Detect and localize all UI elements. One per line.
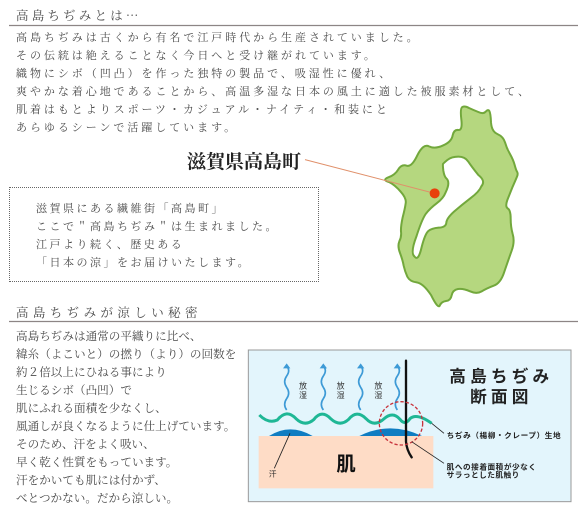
fabric wave xyxy=(259,414,432,423)
explanation text block: 風通しが良くなるように仕上げています。 xyxy=(16,418,235,434)
intro text block: 織物にシボ（凹凸）を作った独特の製品で、吸湿性に優れ、 xyxy=(16,65,393,81)
leader lines xyxy=(274,423,444,468)
explanation text block: 早く乾く性質をもっています。 xyxy=(16,454,177,470)
dashed highlight circle xyxy=(379,402,423,445)
intro text block: 爽やかな着心地であることから、高温多湿な日本の風土に適した被服素材として、 xyxy=(16,83,532,99)
explanation text block: 汗をかいても肌には付かず、 xyxy=(16,472,166,488)
sweat label: 汗 xyxy=(269,469,277,480)
skin label: 肌 xyxy=(336,448,356,476)
moisture labels xyxy=(299,381,382,401)
intro text block: その伝統は絶えることなく今日へと受け継がれています。 xyxy=(16,47,378,63)
callout text: 滋賀県にある繊維街「高島町」 xyxy=(36,200,225,216)
explanation text block: 肌にふれる面積を少なくし、 xyxy=(16,400,167,416)
fabric label: ちぢみ（楊柳・クレープ）生地 xyxy=(447,430,561,441)
moisture labels: 湿 xyxy=(337,390,345,401)
intro text block: あらゆるシーンで活躍しています。 xyxy=(16,119,238,135)
intro text block: 高島ちぢみは古くから有名で江戸時代から生産されていました。 xyxy=(16,29,421,45)
diagram title: 高島ちぢみ xyxy=(449,363,553,387)
moisture labels: 放 xyxy=(374,381,382,392)
moisture labels: 放 xyxy=(299,381,307,392)
contact label: サラっとした肌触り xyxy=(447,469,519,480)
callout text xyxy=(36,200,279,270)
diagram title xyxy=(449,363,553,407)
explanation text block: 緯糸（よこいと）の撚り（より）の回数を xyxy=(16,346,236,362)
moisture labels: 湿 xyxy=(299,390,307,401)
diagram title: 断面図 xyxy=(470,383,533,407)
intro text block: 肌着はもとよりスポーツ・カジュアル・ナイティ・和装にと xyxy=(16,101,390,117)
explanation text block: そのため、汗をよく吸い、 xyxy=(16,436,155,452)
callout text: ここで＂高島ちぢみ＂は生まれました。 xyxy=(36,218,279,234)
sweat drops xyxy=(269,428,422,436)
explanation text block: べとつかない。だから涼しい。 xyxy=(16,490,178,506)
moisture labels: 放 xyxy=(337,381,345,392)
moisture labels: 湿 xyxy=(374,390,382,401)
explanation text block xyxy=(16,328,236,506)
contact label: 肌への接着面積が少なく xyxy=(447,461,536,472)
fabric section line xyxy=(406,361,412,457)
explanation text block: 約２倍以上にひねる事により xyxy=(16,364,167,380)
callout text: 「日本の涼」をお届けいたします。 xyxy=(36,254,251,270)
skin xyxy=(259,436,433,488)
explanation text block: 生じるシボ（凸凹）で xyxy=(16,382,132,398)
moisture arrows xyxy=(285,366,399,410)
callout text: 江戸より続く、歴史ある xyxy=(36,236,184,252)
heading: why Chijimi is cool: 高島ちぢみが涼しい秘密 xyxy=(16,303,202,321)
cross-section diagram xyxy=(248,350,572,502)
intro text block xyxy=(16,29,532,135)
contact label xyxy=(447,461,536,480)
dotted callout box xyxy=(9,187,319,282)
map label: Takashima town, Shiga: 滋賀県高島町 xyxy=(187,147,301,174)
heading: what is Takashima Chijimi: 高島ちぢみとは… xyxy=(16,6,142,24)
explanation text block: 高島ちぢみは通常の平織りに比べ、 xyxy=(16,328,202,344)
